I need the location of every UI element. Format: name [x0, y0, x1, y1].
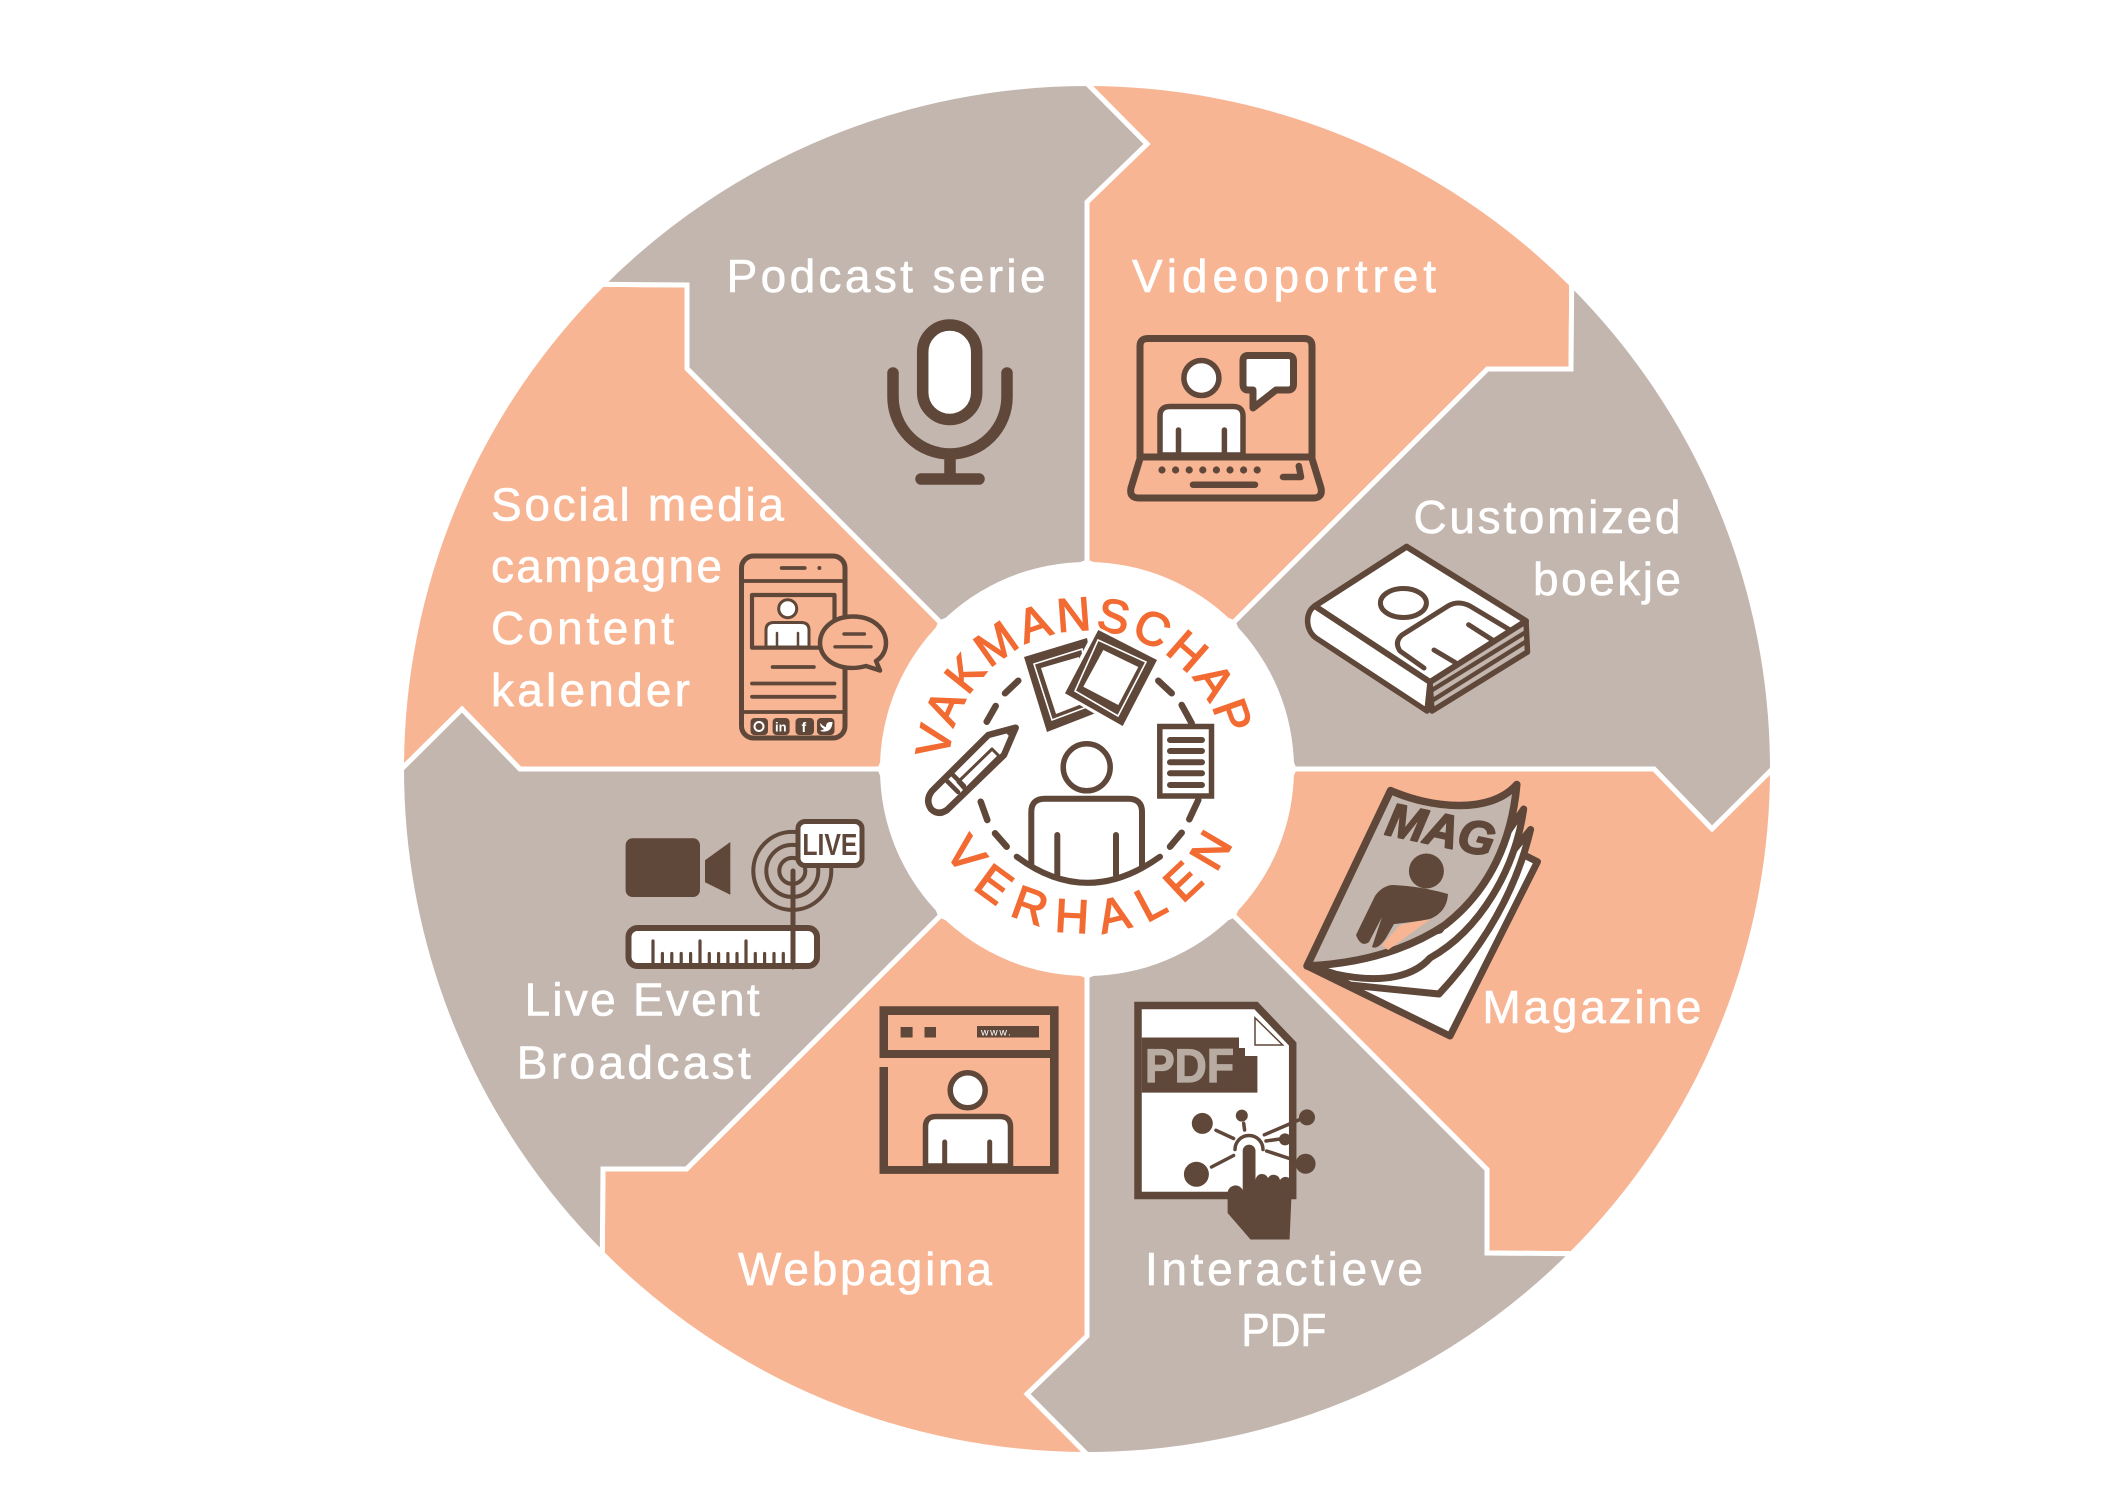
text: facebook mark: f — [802, 719, 806, 735]
panel: Interactieve PDF — [1027, 915, 1572, 1454]
wedge: Webpagina — [602, 915, 1087, 1454]
logo icon: dashed ring — [981, 681, 1198, 847]
label: Social media campagne Content kalender: kalender — [491, 664, 690, 716]
panel: Podcast serie — [602, 84, 1147, 623]
wedge: Social media campagne — [402, 284, 941, 769]
icon: microphone — [893, 325, 1007, 479]
label: Webpagina: Webpagina — [738, 1243, 992, 1295]
wedge: Live Event Broadcast — [402, 709, 941, 1254]
label: Social media campagne Content kalender: campagne — [491, 540, 722, 592]
panel: Webpagina — [602, 915, 1087, 1454]
icon: interactive pdf document — [1138, 1006, 1316, 1240]
logo icon: photo frames — [1024, 626, 1162, 732]
label: Interactieve PDF: Interactieve — [1145, 1243, 1423, 1295]
wedge: Customized boekje — [1233, 284, 1772, 829]
icon: web page with person — [880, 1006, 1059, 1174]
logo icon: pencil — [928, 728, 1016, 813]
logo icon: person — [1017, 744, 1160, 883]
icon: book — [1308, 547, 1528, 711]
text: MAG cover title: MAG — [1382, 792, 1500, 867]
panel: Videoportret — [1087, 84, 1572, 623]
icon: live broadcast camera — [626, 822, 862, 967]
panel: Social media campagne — [402, 284, 941, 769]
label: Podcast serie: Podcast serie — [727, 250, 1046, 302]
label: Live Event Broadcast: Live Event — [525, 974, 760, 1026]
logo text: VERHALEN: VERHALEN — [951, 830, 1232, 935]
label: Social media campagne Content kalender: Content — [491, 602, 674, 654]
label: Customized boekje: Customized — [1414, 491, 1680, 543]
center logo: Vakmanschap Verhalen — [880, 562, 1294, 976]
label: Social media campagne Content kalender: Social media — [491, 478, 784, 530]
text: www address: www. — [980, 1026, 1012, 1038]
panel: Magazine — [1233, 769, 1772, 1254]
icon: magazine — [1307, 784, 1538, 1036]
text: PDF badge: PDF — [1145, 1039, 1234, 1092]
panel: Customized boekje — [1233, 284, 1772, 829]
wedge: Magazine — [1233, 769, 1772, 1254]
icon: phone with social media — [742, 556, 886, 738]
text: LIVE badge: LIVE — [802, 827, 857, 862]
wedge: Podcast serie — [602, 84, 1147, 623]
panel: Live Event Broadcast — [402, 709, 941, 1254]
label: Magazine: Magazine — [1482, 981, 1701, 1033]
icon: laptop with person — [1131, 338, 1321, 498]
label: Live Event Broadcast: Broadcast — [517, 1036, 751, 1088]
label: Videoportret: Videoportret — [1132, 250, 1436, 302]
logo icon: document — [1160, 726, 1212, 796]
label: Customized boekje: boekje — [1533, 553, 1681, 605]
wedge: Videoportret — [1087, 84, 1572, 623]
wedge: Interactieve PDF — [1027, 915, 1572, 1454]
label: Interactieve PDF: PDF — [1241, 1304, 1326, 1356]
logo text: VAKMANSCHAP: VAKMANSCHAP — [914, 596, 1250, 754]
text: linkedin mark: in — [775, 720, 787, 734]
